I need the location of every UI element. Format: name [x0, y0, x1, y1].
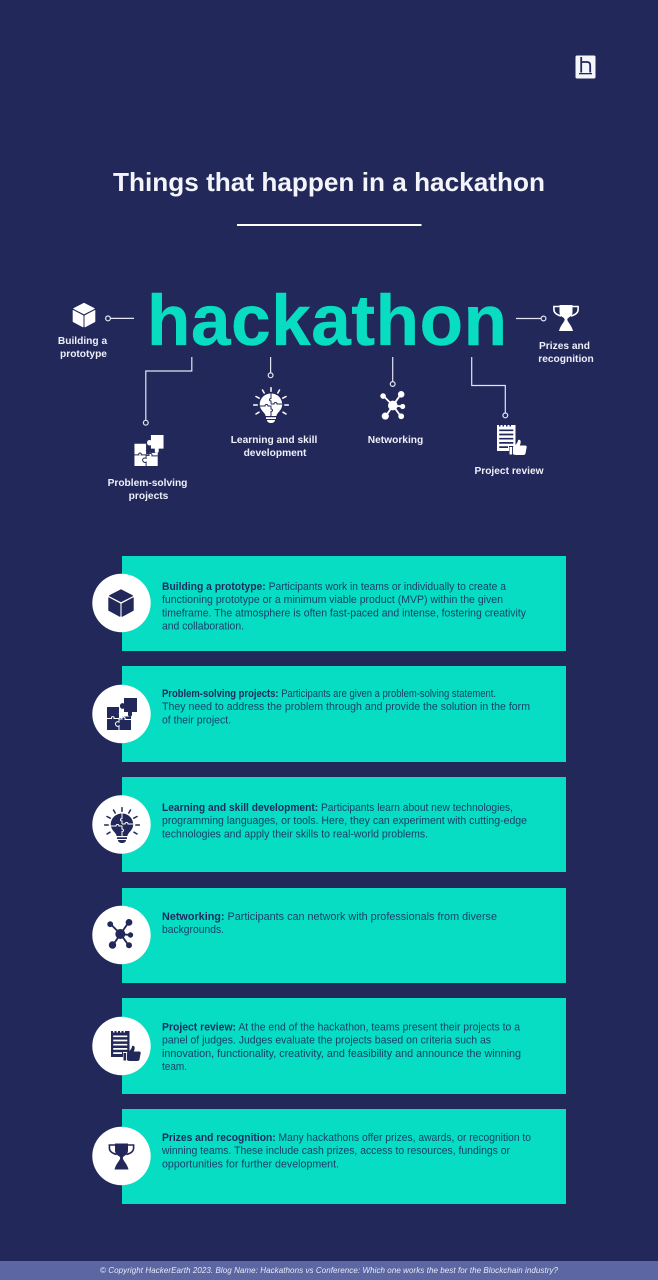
title underline — [237, 224, 422, 226]
icon: review — [111, 1031, 141, 1061]
panel: building a prototype — [92, 556, 566, 651]
panel text: Problem-solving projects: Participants are given a problem-solving statement. — [162, 688, 496, 700]
panel: project review — [92, 998, 566, 1094]
node: learning and skill development — [231, 357, 317, 459]
label: Networking — [368, 435, 423, 446]
panel text — [162, 1022, 521, 1073]
footer — [0, 1261, 658, 1280]
node: project review — [472, 357, 544, 477]
panel text: team. — [162, 1061, 187, 1073]
panel text: innovation, functionality, creativity, and feasibility and announce the winning — [162, 1048, 521, 1060]
panel text: Building a prototype: Participants work in teams or individually to create a — [162, 581, 506, 593]
connector — [472, 357, 508, 418]
icon circle — [92, 906, 151, 964]
icon: bulb — [105, 808, 139, 843]
connector — [143, 357, 192, 425]
panel: networking — [92, 888, 566, 983]
connector — [390, 357, 395, 386]
panel text: of their project. — [162, 714, 231, 726]
icon: review — [497, 425, 527, 455]
connector — [516, 316, 546, 321]
panel text: They need to address the problem through and provide the solution in the form — [162, 701, 530, 713]
icon circle — [92, 795, 151, 854]
icon: trophy — [554, 305, 578, 331]
panel text: winning teams. These include cash prizes, access to resources, fundings or — [161, 1145, 510, 1157]
node: learning and skill development: development — [244, 448, 307, 459]
label: Prizes and — [539, 341, 590, 352]
footer text: © Copyright HackerEarth 2023. Blog Name: Hackathons vs Conference: Which one works the best for the Blockchain industry? — [100, 1266, 559, 1275]
icon: network — [107, 919, 133, 949]
panel: prizes and recognition — [92, 1109, 566, 1204]
icon: trophy — [109, 1144, 134, 1170]
panel text — [162, 581, 527, 632]
icon: cube — [109, 590, 133, 616]
panel text: Prizes and recognition: Many hackathons offer prizes, awards, or recognition to — [162, 1132, 531, 1144]
panel text: Project review: At the end of the hackathon, teams present their projects to a — [162, 1022, 520, 1034]
wordmark: hackathon — [147, 282, 507, 361]
icon: bulb — [254, 388, 288, 423]
icon circle — [92, 1017, 151, 1075]
panel: learning and skill development — [92, 777, 566, 872]
panel text — [162, 688, 530, 726]
panel text: technologies and apply their skills to real-world problems. — [162, 828, 428, 840]
panel text — [162, 802, 527, 840]
panel text: panel of judges. Judges evaluate the projects based on criteria such as — [162, 1035, 491, 1047]
node: building a prototype: prototype — [60, 349, 107, 360]
icon: cube — [73, 303, 95, 327]
label: Building a — [58, 336, 107, 347]
panel text: opportunities for further development. — [162, 1158, 339, 1170]
connector — [268, 357, 273, 378]
panel text: backgrounds. — [162, 924, 224, 936]
node: networking — [368, 357, 423, 446]
label: Project review — [474, 466, 544, 477]
panel text — [161, 1132, 531, 1170]
panel text: timeframe. The atmosphere is often fast-paced and intense, fostering creativity — [162, 607, 527, 619]
icon circle — [92, 685, 151, 743]
logo — [576, 56, 596, 78]
label: Problem-solving — [108, 478, 187, 489]
panel text: programming languages, or tools. Here, they can experiment with cutting-edge — [162, 815, 527, 827]
label: Learning and skill — [231, 435, 317, 446]
icon circle — [92, 574, 151, 632]
panel text: and collaboration. — [162, 620, 244, 632]
node: prizes and recognition — [516, 305, 594, 365]
panel text: functioning prototype or a minimum viable product (MVP) within the given — [162, 594, 503, 606]
panel text: Networking: Participants can network with professionals from diverse — [162, 911, 497, 923]
icon: puzzle — [134, 435, 164, 466]
node: problem-solving projects — [108, 357, 192, 502]
connector — [106, 316, 134, 321]
panel text: Learning and skill development: Participants learn about new technologies, — [162, 802, 513, 814]
panel: problem-solving projects — [92, 666, 566, 762]
icon: puzzle — [107, 698, 137, 730]
title: Things that happen in a hackathon — [113, 167, 545, 197]
panel text — [162, 911, 497, 936]
icon circle — [92, 1127, 151, 1185]
node: prizes and recognition: recognition — [538, 354, 594, 365]
node: problem-solving projects: projects — [129, 491, 169, 502]
node: building a prototype — [58, 303, 134, 360]
icon: network — [380, 391, 405, 420]
